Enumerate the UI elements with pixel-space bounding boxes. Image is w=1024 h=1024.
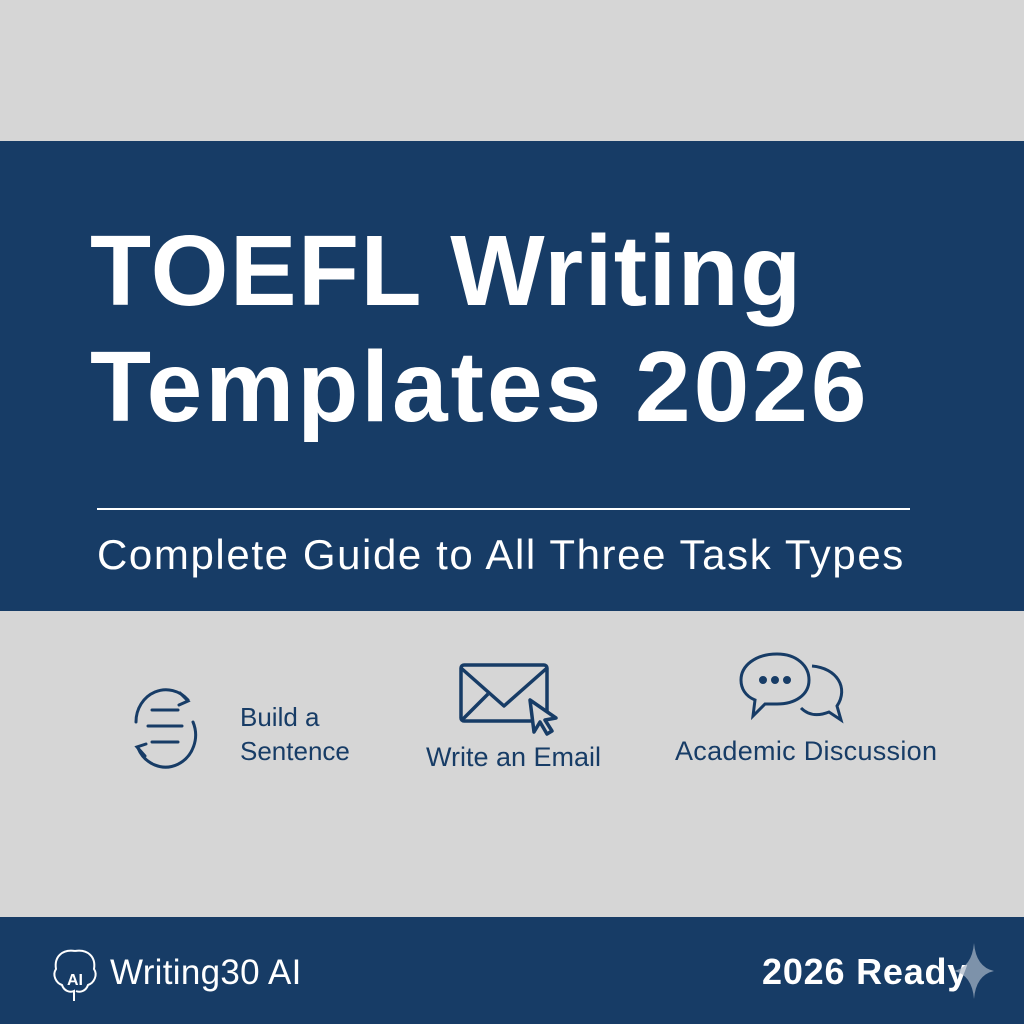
brand text: Writing30 AI: [110, 953, 302, 992]
title: TOEFL Writing: [90, 215, 803, 327]
label: Academic Discussion: [675, 736, 937, 766]
logo: [53, 950, 302, 1001]
icon: speech bubbles: [740, 652, 844, 724]
badge: 2026 Ready: 2026 Ready: [762, 951, 968, 992]
task: email: [426, 663, 601, 772]
title: [90, 215, 869, 443]
label: Sentence: [240, 736, 350, 766]
header band: [0, 141, 1024, 611]
icon: AI brain: AI: [67, 972, 83, 989]
task: academic discussion: [675, 652, 937, 766]
subtitle: Complete Guide to All Three Task Types: [97, 531, 905, 578]
icon: cycle: [134, 688, 198, 769]
label: [240, 702, 350, 766]
task: build a sentence: [134, 688, 350, 769]
icon: sparkle: [954, 944, 994, 998]
label: Write an Email: [426, 742, 601, 772]
footer: [0, 917, 1024, 1024]
title: Templates 2026: [90, 331, 869, 443]
icon: envelope: [459, 663, 558, 736]
icon: AI brain: [53, 950, 97, 1001]
label: Build a: [240, 702, 320, 732]
badge: 2026 Ready: [762, 944, 994, 998]
